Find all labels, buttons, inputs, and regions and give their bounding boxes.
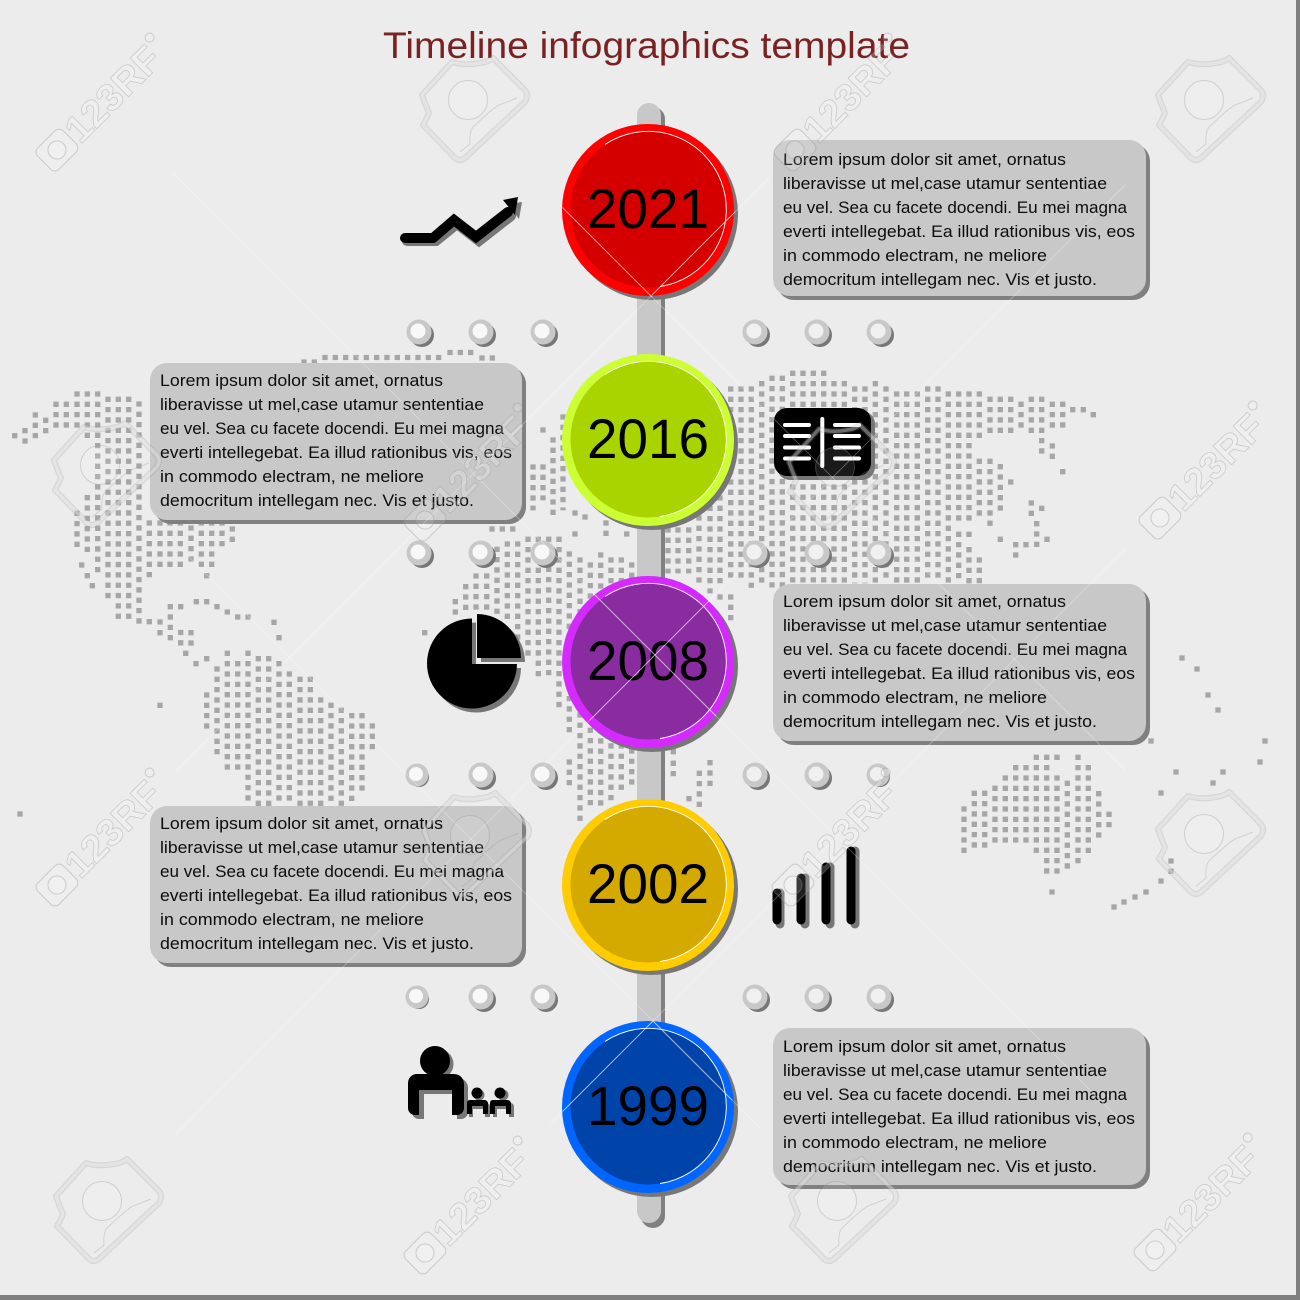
text panel 2016: in commodo electram, ne meliore — [160, 467, 424, 486]
text panel 2002: eu vel. Sea cu facete docendi. Eu mei magna — [160, 862, 505, 881]
year badge 2021 — [562, 124, 738, 300]
text panel 1999: in commodo electram, ne meliore — [783, 1133, 1047, 1152]
title: Timeline infographics template — [383, 25, 910, 66]
text panel 2008: in commodo electram, ne meliore — [783, 688, 1047, 707]
text panel 2002: in commodo electram, ne meliore — [160, 910, 424, 929]
watermark wordmarks: 123RF — [795, 38, 908, 151]
year badge 2008 — [562, 576, 738, 752]
diagonal lines over badges — [563, 208, 735, 1111]
watermark wordmarks: 123RF — [1160, 406, 1273, 519]
year badge 1999 — [562, 1021, 738, 1197]
text panel 2021: in commodo electram, ne meliore — [783, 246, 1047, 265]
text panel 2021: everti intellegebat. Ea illud rationibus vis, eos — [783, 222, 1135, 241]
text panel 2016: liberavisse ut mel,case utamur sententiae — [160, 395, 484, 414]
text panel 2008: liberavisse ut mel,case utamur sententiae — [783, 616, 1107, 635]
text panel 2008: everti intellegebat. Ea illud rationibus vis, eos — [783, 664, 1135, 683]
text panel 2016: democritum intellegam nec. Vis et justo. — [160, 491, 474, 510]
small dots row 1 — [406, 320, 894, 347]
text panel 2021: eu vel. Sea cu facete docendi. Eu mei magna — [783, 198, 1128, 217]
icon: signal bars — [777, 851, 855, 924]
text panel 2021 — [773, 140, 1150, 300]
watermark wordmarks: 123RF — [425, 408, 538, 521]
faint diagonal light lines — [170, 173, 1125, 1135]
text panel 2016 — [150, 363, 526, 524]
text panel 2008: eu vel. Sea cu facete docendi. Eu mei magna — [783, 640, 1128, 659]
watermark wordmarks: 123RF — [57, 38, 170, 151]
small dots row 2 — [406, 540, 894, 568]
text panel 2008 — [773, 584, 1150, 745]
text panel 2008: democritum intellegam nec. Vis et justo. — [783, 712, 1097, 731]
text panel 2002: everti intellegebat. Ea illud rationibus vis, eos — [160, 886, 512, 905]
year badge 2021: 2021 — [587, 177, 709, 240]
small dots row 3 — [406, 762, 890, 790]
text panel 1999 — [773, 1028, 1150, 1189]
watermark wordmarks: 123RF — [1155, 1138, 1268, 1251]
text panel 1999: eu vel. Sea cu facete docendi. Eu mei magna — [783, 1085, 1128, 1104]
watermark wordmarks: 123RF — [425, 1141, 538, 1254]
text panel 2002: liberavisse ut mel,case utamur sententiae — [160, 838, 484, 857]
small dots row 4 — [406, 984, 894, 1012]
year badge 2016: 2016 — [587, 407, 709, 470]
year badge 1999: 1999 — [587, 1074, 709, 1137]
text panel 1999: liberavisse ut mel,case utamur sententiae — [783, 1061, 1107, 1080]
text panel 2002 — [150, 806, 526, 967]
text panel 2021: Lorem ipsum dolor sit amet, ornatus — [783, 150, 1066, 169]
text panel 2021: democritum intellegam nec. Vis et justo. — [783, 270, 1097, 289]
year badge 2002 — [562, 799, 738, 975]
text panel 2008: Lorem ipsum dolor sit amet, ornatus — [783, 592, 1066, 611]
watermark wordmarks: 123RF — [793, 773, 906, 886]
watermark wordmarks: 123RF — [57, 773, 170, 886]
dotted world map — [15, 352, 1265, 910]
year badge 2016 — [562, 354, 738, 530]
text panel 2016: everti intellegebat. Ea illud rationibus vis, eos — [160, 443, 512, 462]
icon: open book — [774, 408, 875, 480]
text panel 1999: everti intellegebat. Ea illud rationibus vis, eos — [783, 1109, 1135, 1128]
icon: rising trend arrow — [405, 197, 522, 241]
year badge 2002: 2002 — [587, 852, 709, 915]
text panel 2002: Lorem ipsum dolor sit amet, ornatus — [160, 814, 443, 833]
text panel 2021: liberavisse ut mel,case utamur sententiae — [783, 174, 1107, 193]
text panel 2016: eu vel. Sea cu facete docendi. Eu mei magna — [160, 419, 505, 438]
icon: adult and children — [408, 1046, 514, 1119]
text panel 2016: Lorem ipsum dolor sit amet, ornatus — [160, 371, 443, 390]
text panel 1999: democritum intellegam nec. Vis et justo. — [783, 1157, 1097, 1176]
icon: pie chart — [427, 614, 525, 712]
text panel 2002: democritum intellegam nec. Vis et justo. — [160, 934, 474, 953]
text panel 1999: Lorem ipsum dolor sit amet, ornatus — [783, 1037, 1066, 1056]
year badge 2008: 2008 — [587, 629, 709, 692]
timeline bar — [637, 103, 665, 1228]
